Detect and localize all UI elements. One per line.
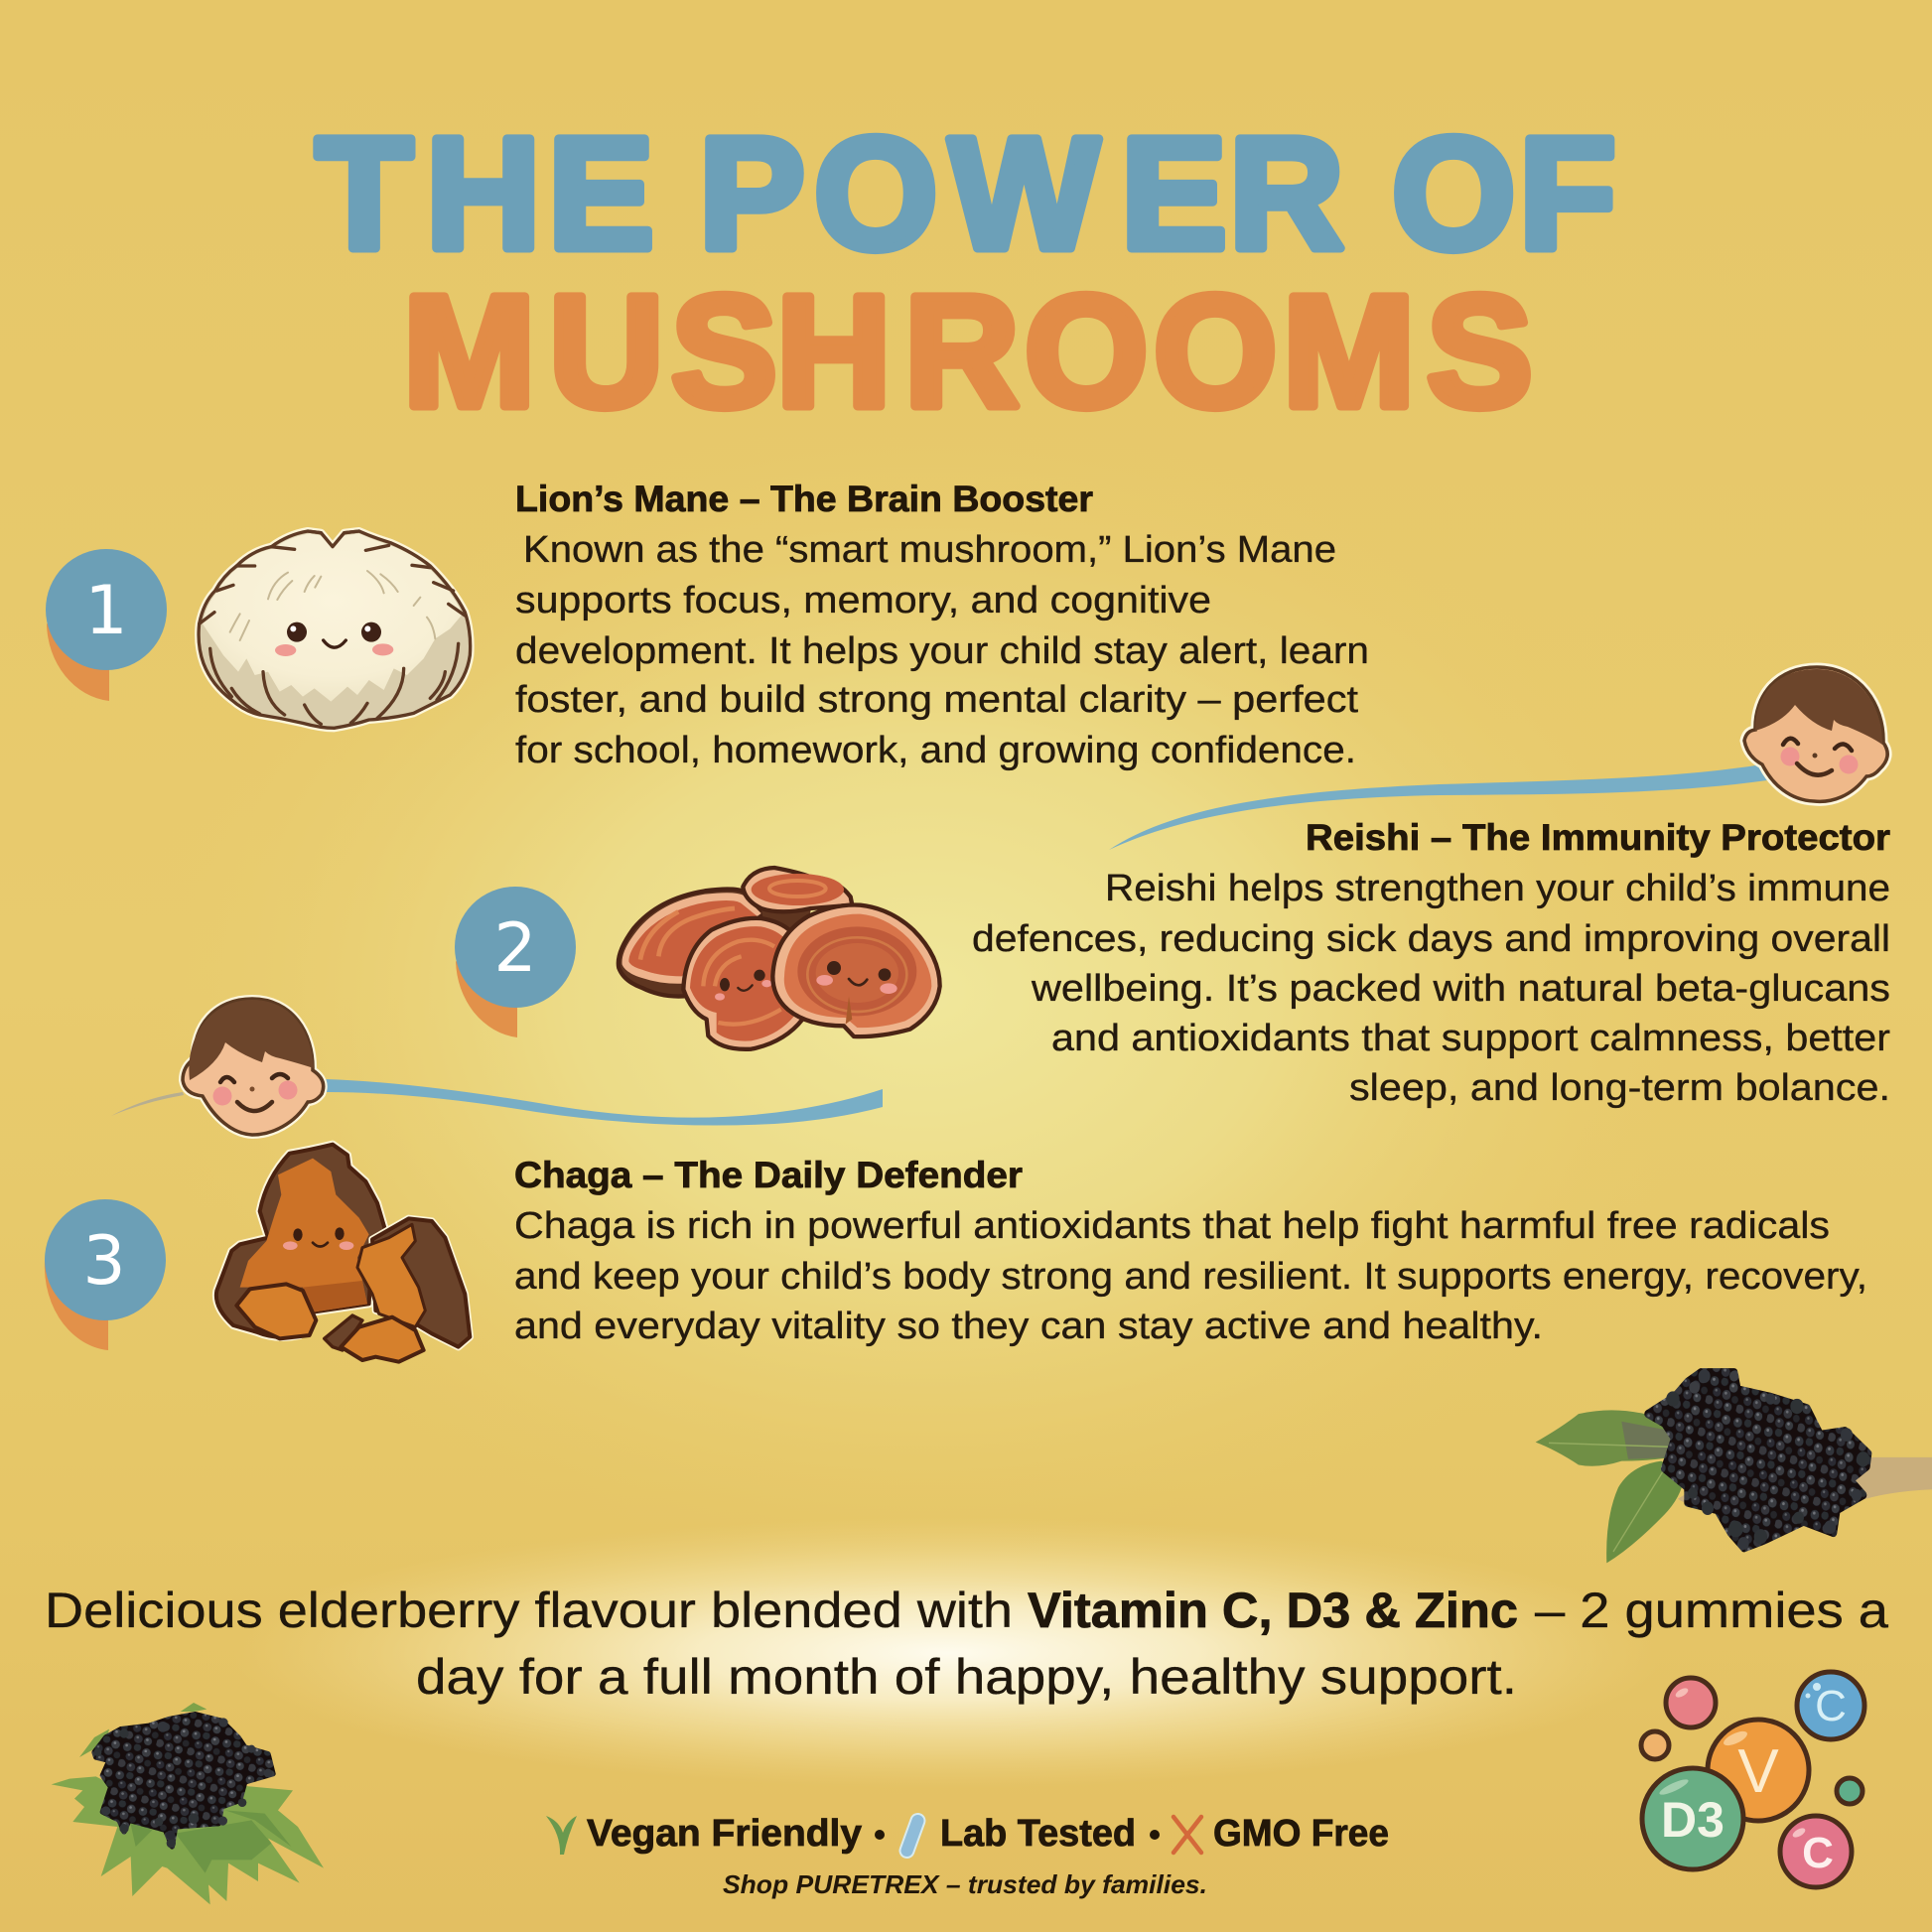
lower right chunk	[325, 1315, 424, 1362]
blue ribbon	[326, 1079, 883, 1126]
arrow: lower swoosh	[111, 1079, 883, 1126]
left cap	[619, 890, 764, 997]
paragraph: chaga	[514, 1205, 1867, 1347]
icon: elderberries on spoon	[1536, 1369, 1932, 1563]
label: lab tested: Lab Tested	[940, 1813, 1136, 1855]
leaf lower	[1606, 1461, 1685, 1563]
paragraph: lion's mane: development. It helps your child stay alert, learn	[515, 630, 1369, 672]
top cap	[743, 868, 852, 933]
paragraph: chaga: and everyday vitality so they can stay active and healthy.	[514, 1306, 1543, 1347]
right cap	[772, 904, 940, 1036]
orange V bubble	[1708, 1720, 1809, 1821]
heading: lion's mane: Lion’s Mane – The Brain Booster	[515, 479, 1093, 519]
blue C bubble: C	[1815, 1682, 1847, 1730]
orange V bubble: V	[1737, 1737, 1779, 1806]
number badge 2: 2	[493, 909, 537, 988]
line 2: day for a full month of happy, healthy support.	[416, 1649, 1517, 1705]
label: vegan friendly: Vegan Friendly	[587, 1813, 862, 1855]
number badge 1: 1	[84, 572, 128, 650]
text: chaga	[514, 1155, 1867, 1347]
title	[316, 104, 1616, 440]
paragraph: chaga: and keep your child’s body strong and resilient. It supports energy, recovery,	[514, 1256, 1867, 1298]
berries	[93, 1715, 273, 1848]
paragraph: lion's mane	[515, 529, 1369, 771]
paragraph: lion's mane: Known as the “smart mushroom,” Lion’s Mane	[523, 529, 1336, 571]
number badge 3	[45, 1199, 166, 1350]
thin tail	[111, 1092, 184, 1116]
line 1: Delicious elderberry flavour blended with	[45, 1583, 1013, 1638]
paragraph: reishi: sleep, and long-term bolance.	[1349, 1067, 1890, 1109]
icon: reishi mushrooms	[619, 868, 940, 1049]
bullet	[875, 1830, 885, 1840]
middle cap	[683, 918, 802, 1049]
arrow: top swoosh	[1109, 764, 1767, 850]
paragraph: lion's mane: supports focus, memory, and cognitive	[515, 580, 1211, 621]
paragraph: lion's mane: for school, homework, and growing confidence.	[515, 730, 1356, 771]
line 1: – 2 gummies a	[1535, 1583, 1888, 1638]
tagline: Shop PURETREX – trusted by families.	[723, 1869, 1207, 1899]
paragraph: lion's mane: foster, and build strong mental clarity – perfect	[515, 679, 1358, 721]
icon: chaga chunks	[216, 1145, 470, 1362]
green D3 bubble: D3	[1661, 1792, 1725, 1848]
top left leaf	[79, 1729, 109, 1757]
closing statement	[45, 1583, 1888, 1705]
top leaf	[181, 1703, 207, 1712]
number badge 1	[46, 549, 167, 701]
icon: cross	[1173, 1817, 1201, 1853]
text: reishi	[972, 817, 1890, 1109]
icon: child face lower left	[183, 999, 324, 1135]
chaga face	[283, 1227, 353, 1250]
paragraph: reishi: Reishi helps strengthen your child’s immune	[1105, 868, 1890, 909]
title line 2: MUSHROOMS	[403, 262, 1533, 440]
icon: lion's mane mushroom	[199, 531, 471, 728]
green D3 bubble	[1642, 1768, 1743, 1869]
title line 1: THE POWER OF	[316, 104, 1616, 282]
leaf upper	[1536, 1410, 1671, 1466]
blue C bubble	[1797, 1672, 1864, 1739]
paragraph: reishi	[972, 868, 1890, 1109]
paragraph: reishi: wellbeing. It’s packed with natural beta-glucans	[1031, 968, 1890, 1010]
text: lion's mane	[515, 479, 1369, 771]
small orange bubble	[1641, 1731, 1669, 1759]
pink C bubble	[1780, 1816, 1852, 1887]
spoon	[1678, 1457, 1932, 1516]
berry cluster	[1648, 1369, 1869, 1550]
heading: chaga: Chaga – The Daily Defender	[514, 1155, 1023, 1195]
icon: elderberry bunch with leaves	[52, 1703, 324, 1904]
icon: vitamin bubbles	[1641, 1672, 1864, 1887]
main chunk	[216, 1145, 385, 1337]
trust badges	[546, 1812, 1389, 1860]
small green bubble	[1837, 1778, 1863, 1804]
bullet	[1150, 1830, 1160, 1840]
number badge 2	[455, 887, 576, 1037]
paragraph: chaga: Chaga is rich in powerful antioxidants that help fight harmful free radicals	[514, 1205, 1830, 1247]
lower left chunk	[236, 1284, 316, 1338]
leaves	[52, 1776, 324, 1904]
pink C bubble: C	[1802, 1829, 1834, 1877]
heading: reishi: Reishi – The Immunity Protector	[1306, 817, 1890, 858]
number badge 3: 3	[82, 1222, 126, 1301]
line 1: Vitamin C, D3 & Zinc	[1028, 1583, 1518, 1638]
paragraph: reishi: defences, reducing sick days and improving overall	[972, 918, 1890, 960]
paragraph: reishi: and antioxidants that support calmness, better	[1051, 1018, 1890, 1059]
pink bubble	[1666, 1678, 1716, 1727]
icon: sprout	[546, 1816, 577, 1855]
line 1	[45, 1583, 1888, 1638]
icon: capsule	[898, 1812, 926, 1860]
label: gmo free: GMO Free	[1213, 1813, 1389, 1855]
icon: child face top right	[1744, 667, 1887, 801]
right chunk	[357, 1218, 470, 1347]
